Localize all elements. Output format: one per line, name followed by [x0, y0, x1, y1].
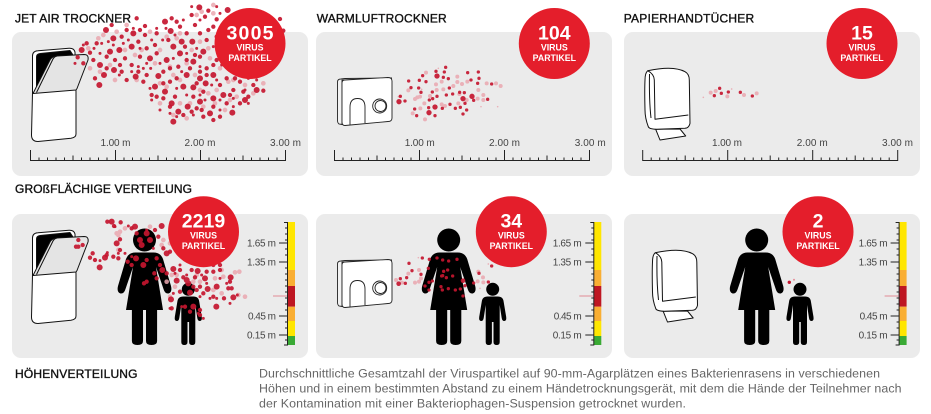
height scale: 0.15 m	[553, 330, 582, 342]
distance scale: 3.00 m	[575, 138, 606, 149]
height scale: 1.65 m	[859, 238, 888, 250]
heading: höhenverteilung: HÖHENVERTEILUNG	[15, 367, 138, 381]
figure: woman	[118, 228, 171, 345]
height scale: 0.15 m	[859, 330, 888, 342]
badge: 104 virus particles: PARTIKEL	[533, 53, 577, 63]
distance scale: 2.00 m	[184, 138, 216, 149]
badge: 34 virus particles: VIRUS	[498, 231, 525, 241]
distance scale: 1.00 m	[100, 138, 130, 149]
icon: jet air dryer	[32, 230, 88, 324]
panel: paper towels height	[624, 196, 920, 358]
figure: woman	[730, 228, 784, 345]
badge: 3005 virus particles: PARTIKEL	[228, 53, 272, 63]
figure: child	[479, 283, 506, 345]
figure: child	[175, 283, 202, 345]
badge: 15 virus particles	[826, 8, 898, 79]
panel: warm air dryer height	[316, 196, 612, 358]
particle cloud: warm air dryer	[398, 67, 501, 119]
height scale: 1.65 m	[247, 238, 276, 250]
icon: warm air dryer	[338, 78, 392, 126]
badge: 104 virus particles: VIRUS	[541, 42, 568, 52]
heading: papierhandtücher: PAPIERHANDTÜCHER	[624, 12, 755, 26]
height scale: 0.45 m	[554, 312, 582, 322]
particle cloud: paper towels	[703, 88, 757, 97]
distance scale	[334, 138, 606, 160]
badge: 2 virus particles	[782, 196, 854, 267]
panel: warm air dryer spread	[316, 8, 612, 176]
heading: warmluftrockner: WARMLUFTROCKNER	[317, 12, 447, 26]
badge: 2 virus particles: PARTIKEL	[796, 241, 840, 251]
badge: 2219 virus particles: VIRUS	[190, 231, 217, 241]
distance scale: 1.00 m	[405, 138, 435, 149]
badge: 15 virus particles: PARTIKEL	[840, 53, 884, 63]
distance scale: 3.00 m	[882, 138, 913, 149]
badge: 34 virus particles: PARTIKEL	[490, 241, 534, 251]
icon: jet air dryer	[32, 48, 88, 142]
badge: 2219 virus particles: PARTIKEL	[182, 241, 226, 251]
description text	[259, 366, 902, 410]
badge: 2 virus particles: VIRUS	[805, 231, 832, 241]
description text: Durchschnittliche Gesamtzahl der Viruspartikel auf 90-mm-Agarplätzen eines Bakterienrasens in verschiedenen	[259, 366, 880, 380]
distance scale	[30, 138, 301, 160]
description text: der Kontamination mit einer Bakteriophagen-Suspension getrocknet wurden.	[259, 396, 686, 410]
badge: 2 virus particles: 2	[813, 211, 824, 233]
particle cloud: paper towels height	[788, 279, 795, 284]
panel: jet air dryer height	[12, 196, 308, 358]
panel: paper towels spread	[624, 8, 920, 176]
particle cloud: jet air dryer	[75, 5, 283, 122]
height scale	[553, 222, 601, 346]
panel: jet air dryer spread	[12, 5, 308, 176]
height scale: 1.35 m	[553, 258, 582, 268]
icon: warm air dryer	[338, 260, 392, 308]
height scale: 0.15 m	[247, 330, 276, 342]
badge: 34 virus particles: 34	[500, 211, 522, 233]
badge: 104 virus particles: 104	[538, 22, 571, 44]
icon: paper towel dispenser	[645, 68, 690, 140]
height scale: 1.35 m	[247, 258, 276, 268]
badge: 2219 virus particles: 2219	[182, 211, 225, 233]
distance scale: 3.00 m	[270, 138, 301, 149]
distance scale: 2.00 m	[797, 138, 828, 149]
badge: 3005 virus particles	[214, 8, 286, 79]
heading: jet air trockner: JET AIR TROCKNER	[15, 12, 131, 26]
badge: 3005 virus particles: VIRUS	[237, 42, 264, 52]
distance scale	[643, 138, 913, 160]
particle cloud: warm air dryer height	[396, 258, 492, 296]
distance scale: 2.00 m	[489, 138, 520, 149]
height scale: 0.45 m	[860, 312, 888, 322]
height scale	[247, 222, 295, 346]
badge: 2219 virus particles	[168, 196, 239, 267]
badge: 3005 virus particles: 3005	[226, 22, 274, 44]
height scale: 1.65 m	[553, 238, 582, 250]
badge: 34 virus particles	[476, 196, 547, 267]
badge: 15 virus particles: VIRUS	[849, 42, 876, 52]
description text: Höhen und in einem bestimmten Abstand zu einem Händetrocknungsgerät, mit dem die Hände der Teilnehmer nach	[259, 382, 902, 396]
particle cloud: jet air dryer height	[76, 222, 245, 318]
icon: paper towel dispenser	[652, 250, 698, 322]
heading: großflächige verteilung: GROßFLÄCHIGE VERTEILUNG	[15, 182, 192, 196]
badge: 15 virus particles: 15	[851, 22, 873, 44]
figure: child	[786, 283, 814, 345]
height scale: 0.45 m	[248, 312, 276, 322]
height scale	[859, 222, 907, 346]
distance scale: 1.00 m	[712, 138, 742, 149]
badge: 104 virus particles	[519, 8, 590, 79]
figure: woman	[422, 228, 476, 345]
height scale: 1.35 m	[859, 258, 888, 268]
